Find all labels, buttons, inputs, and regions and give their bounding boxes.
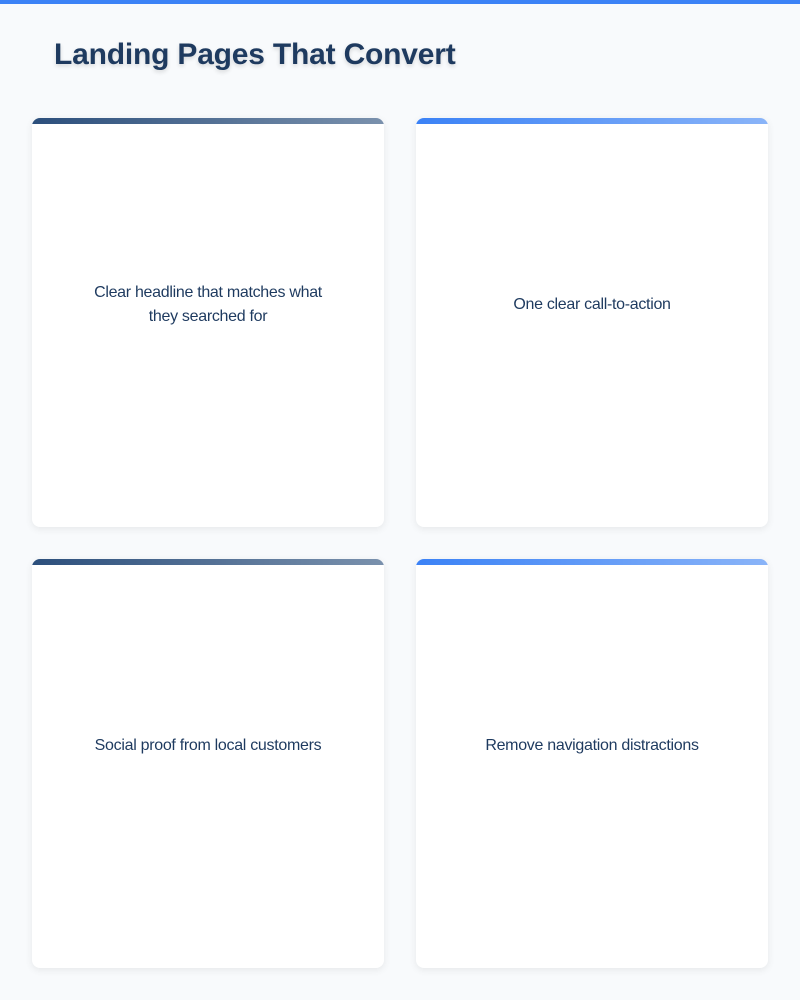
title: Landing Pages That Convert <box>54 38 456 71</box>
panel: navigation <box>416 559 768 968</box>
panel: headline <box>32 118 384 527</box>
text: cta: One clear call-to-action <box>513 296 671 312</box>
panel: cta <box>416 118 768 527</box>
text: headline: Clear headline that matches what they searched for <box>94 284 322 324</box>
panel: social proof <box>32 559 384 968</box>
text: navigation: Remove navigation distractions <box>485 736 699 754</box>
text: social proof: Social proof from local customers <box>95 736 321 754</box>
